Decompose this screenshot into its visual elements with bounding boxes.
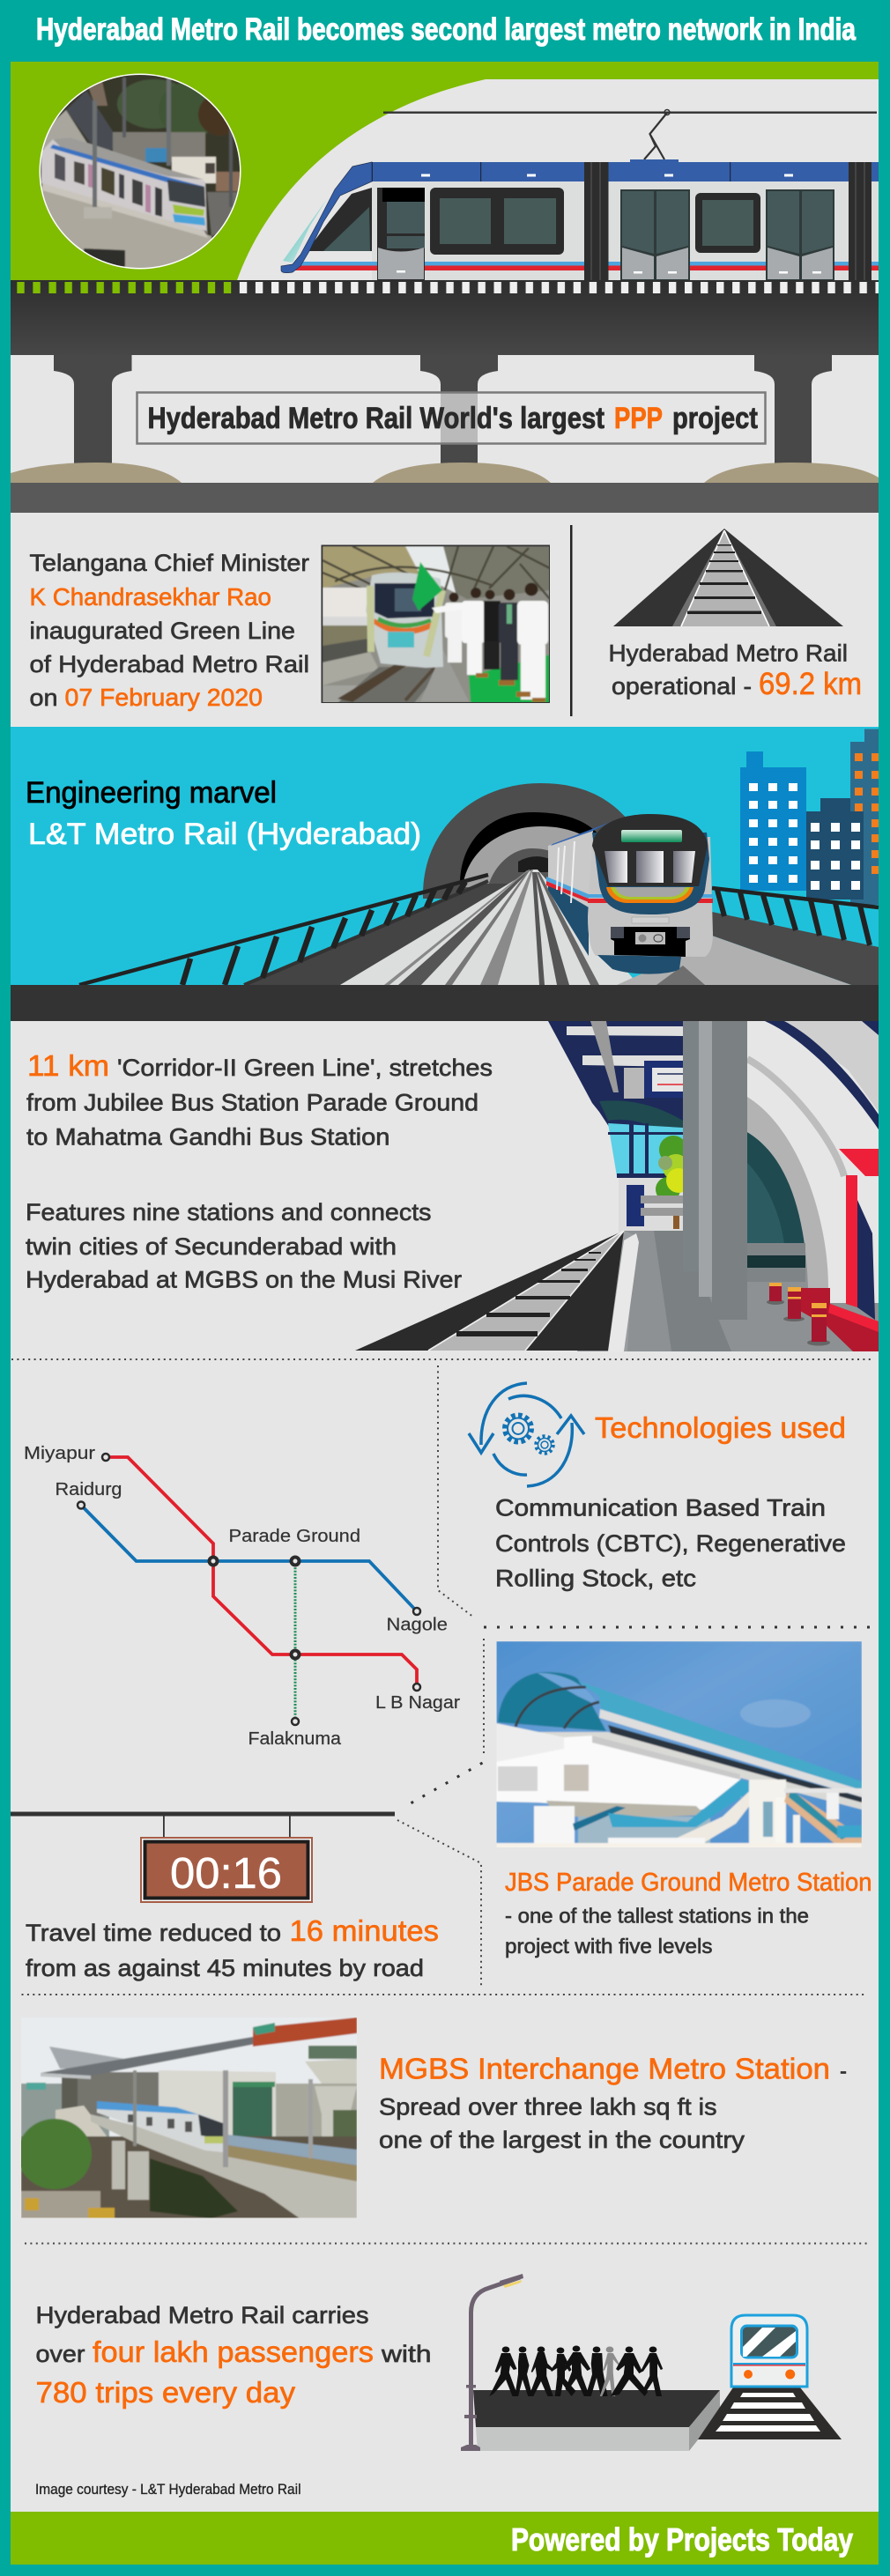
- text: travel time: [26, 1914, 439, 1981]
- text: passengers and trips: over: [35, 2341, 85, 2367]
- train front: [546, 814, 713, 974]
- text: chief minister inauguration: K Chandrasekhar Rao: [30, 583, 271, 611]
- metro route map: [24, 1444, 460, 1749]
- station backdrop curve: [237, 79, 879, 280]
- text: MGBS spread: [379, 2093, 745, 2153]
- passenger 1: [489, 2347, 518, 2396]
- text: tallest stations: - one of the tallest stations in the: [505, 1905, 809, 1928]
- text: corridor II: from Jubilee Bus Station Parade Ground: [26, 1089, 478, 1115]
- panel: passengers: [35, 2274, 842, 2498]
- text: travel time: Travel time reduced to: [26, 1920, 281, 1946]
- text: nine stations: Hyderabad at MGBS on the Musi River: [26, 1267, 462, 1293]
- door 1: [377, 188, 425, 280]
- text: chief minister inauguration: 07 February 2020: [65, 684, 263, 711]
- clock display: 00:16: [170, 1850, 282, 1898]
- overhead wire and pantograph: [383, 109, 877, 162]
- panel: corridor details: [26, 1021, 879, 1351]
- station labels: Miyapur: [24, 1444, 95, 1463]
- passenger 4: [551, 2347, 576, 2396]
- heading: MGBS station: -: [840, 2058, 847, 2084]
- text: tallest stations: [505, 1905, 809, 1958]
- panel: JBS Parade Ground station: [496, 1641, 872, 1958]
- door 2: [620, 189, 690, 280]
- green line: [294, 1561, 296, 1721]
- text: CBTC: Communication Based Train: [495, 1494, 826, 1521]
- text: travel time: from as against 45 minutes by road: [26, 1955, 424, 1981]
- icon: gears with cycle arrows: [469, 1383, 584, 1486]
- track perspective: [340, 870, 639, 985]
- blue line: [81, 1505, 417, 1611]
- photo: JBS station: [496, 1641, 862, 1848]
- text: corridor II: 'Corridor-II Green Line', stretches: [117, 1055, 493, 1081]
- heading: JBS station: JBS Parade Ground Metro Station: [505, 1869, 872, 1897]
- text: operational length: operational -: [612, 673, 752, 700]
- text: corridor II: to Mahatma Gandhi Bus Station: [26, 1124, 389, 1151]
- text: tallest stations: project with five levels: [505, 1935, 712, 1958]
- panel: technologies used: [469, 1383, 846, 1591]
- banner: world's largest PPP project: project: [672, 402, 758, 435]
- text: travel time: 16 minutes: [289, 1914, 439, 1947]
- station labels: Nagole: [386, 1616, 448, 1635]
- dark deck strip: [11, 985, 879, 1021]
- right deck and railing: [617, 888, 879, 985]
- heading: engineering marvel: Engineering marvel: [26, 776, 277, 810]
- text: CBTC: [495, 1494, 846, 1591]
- text: CBTC: Rolling Stock, etc: [495, 1565, 696, 1591]
- image courtesy: Image courtesy - L&T Hyderabad Metro Rail: [35, 2481, 301, 2498]
- window B: [695, 193, 760, 253]
- heading: engineering marvel: L&T Metro Rail (Hyderabad): [28, 818, 421, 851]
- text: operational length: 69.2 km: [759, 667, 862, 701]
- heading: engineering marvel: [26, 776, 421, 851]
- text: chief minister inauguration: on: [30, 685, 58, 711]
- footer: [11, 2512, 879, 2565]
- sign bar and rods: [11, 1811, 395, 1838]
- station labels: Falaknuma: [248, 1729, 342, 1749]
- panel: hero train on viaduct: [11, 62, 879, 513]
- passenger 3: [529, 2347, 553, 2396]
- text: chief minister inauguration: [30, 550, 309, 711]
- photo: metro train in circle: [35, 74, 242, 270]
- text: chief minister inauguration: Telangana Chief Minister: [30, 550, 309, 576]
- text: operational length: Hyderabad Metro Rail: [608, 640, 848, 666]
- photo: MGBS station: [18, 2017, 357, 2218]
- window A: [430, 188, 564, 255]
- train illustration: [281, 162, 879, 284]
- station labels: [24, 1444, 460, 1749]
- panel: travel time: [11, 1811, 439, 1981]
- photo: flag-off ceremony: [321, 544, 550, 703]
- passenger 7: [600, 2347, 619, 2396]
- banner: world's largest PPP project: PPP: [614, 402, 663, 435]
- text: chief minister inauguration: inaugurated Green Line: [30, 618, 295, 644]
- panel: engineering marvel: [11, 727, 879, 1021]
- icon: railway track triangle: [613, 529, 843, 626]
- green background: [11, 62, 879, 282]
- panel: MGBS interchange: [18, 2017, 847, 2218]
- text: passengers and trips: four lakh passengers: [93, 2335, 374, 2368]
- text: nine stations: Features nine stations and connects: [26, 1199, 432, 1225]
- text: MGBS spread: one of the largest in the country: [379, 2127, 745, 2153]
- door 3: [766, 189, 834, 280]
- passenger 6: [585, 2347, 608, 2396]
- text: passengers and trips: with: [381, 2341, 432, 2367]
- station labels: Raidurg: [55, 1480, 122, 1499]
- text: operational length: [608, 640, 862, 701]
- cyan background: [11, 727, 879, 985]
- text: corridor II: 11 km: [27, 1049, 109, 1082]
- icon: train on track: [698, 2315, 842, 2439]
- clock display: [141, 1838, 312, 1902]
- passenger 8: [611, 2347, 648, 2396]
- red line: [106, 1457, 417, 1687]
- text: chief minister inauguration: of Hyderabad Metro Rail: [30, 651, 309, 677]
- piers and mounds: [11, 355, 879, 513]
- text: passengers and trips: [35, 2302, 432, 2409]
- passenger 5: [562, 2345, 590, 2396]
- divider: [570, 525, 573, 716]
- stations: [78, 1454, 420, 1725]
- text: passengers and trips: Hyderabad Metro Rail carries: [35, 2302, 369, 2328]
- text: corridor II: [26, 1049, 493, 1151]
- dotted dividers: [11, 1359, 874, 2243]
- icon: street lamp: [461, 2274, 523, 2451]
- banner: world's largest PPP project: Hyderabad Metro Rail World's largest: [148, 402, 604, 435]
- illustration: station platform: [355, 1021, 879, 1351]
- text: passengers and trips: 780 trips every day: [35, 2376, 296, 2409]
- banner: world's largest PPP project: [137, 393, 765, 444]
- passenger 9: [641, 2347, 663, 2396]
- text: nine stations: [26, 1199, 462, 1293]
- text: CBTC: Controls (CBTC), Regenerative: [495, 1530, 846, 1557]
- heading: MGBS station: MGBS Interchange Metro Station: [379, 2053, 830, 2084]
- buildings: [740, 729, 879, 905]
- station labels: L B Nagar: [375, 1693, 460, 1713]
- heading: technologies used: Technologies used: [595, 1411, 846, 1444]
- panel: inauguration: [30, 525, 862, 716]
- viaduct deck with ties: [11, 280, 879, 355]
- icon: passengers silhouettes: [489, 2345, 663, 2396]
- text: nine stations: twin cities of Secunderabad with: [26, 1233, 397, 1260]
- passenger 2: [515, 2347, 532, 2396]
- station labels: Parade Ground: [229, 1527, 360, 1546]
- tunnel: [423, 783, 627, 899]
- platform: [473, 2390, 720, 2451]
- left deck and railing: [79, 875, 520, 985]
- text: MGBS spread: Spread over three lakh sq ft is: [379, 2093, 717, 2120]
